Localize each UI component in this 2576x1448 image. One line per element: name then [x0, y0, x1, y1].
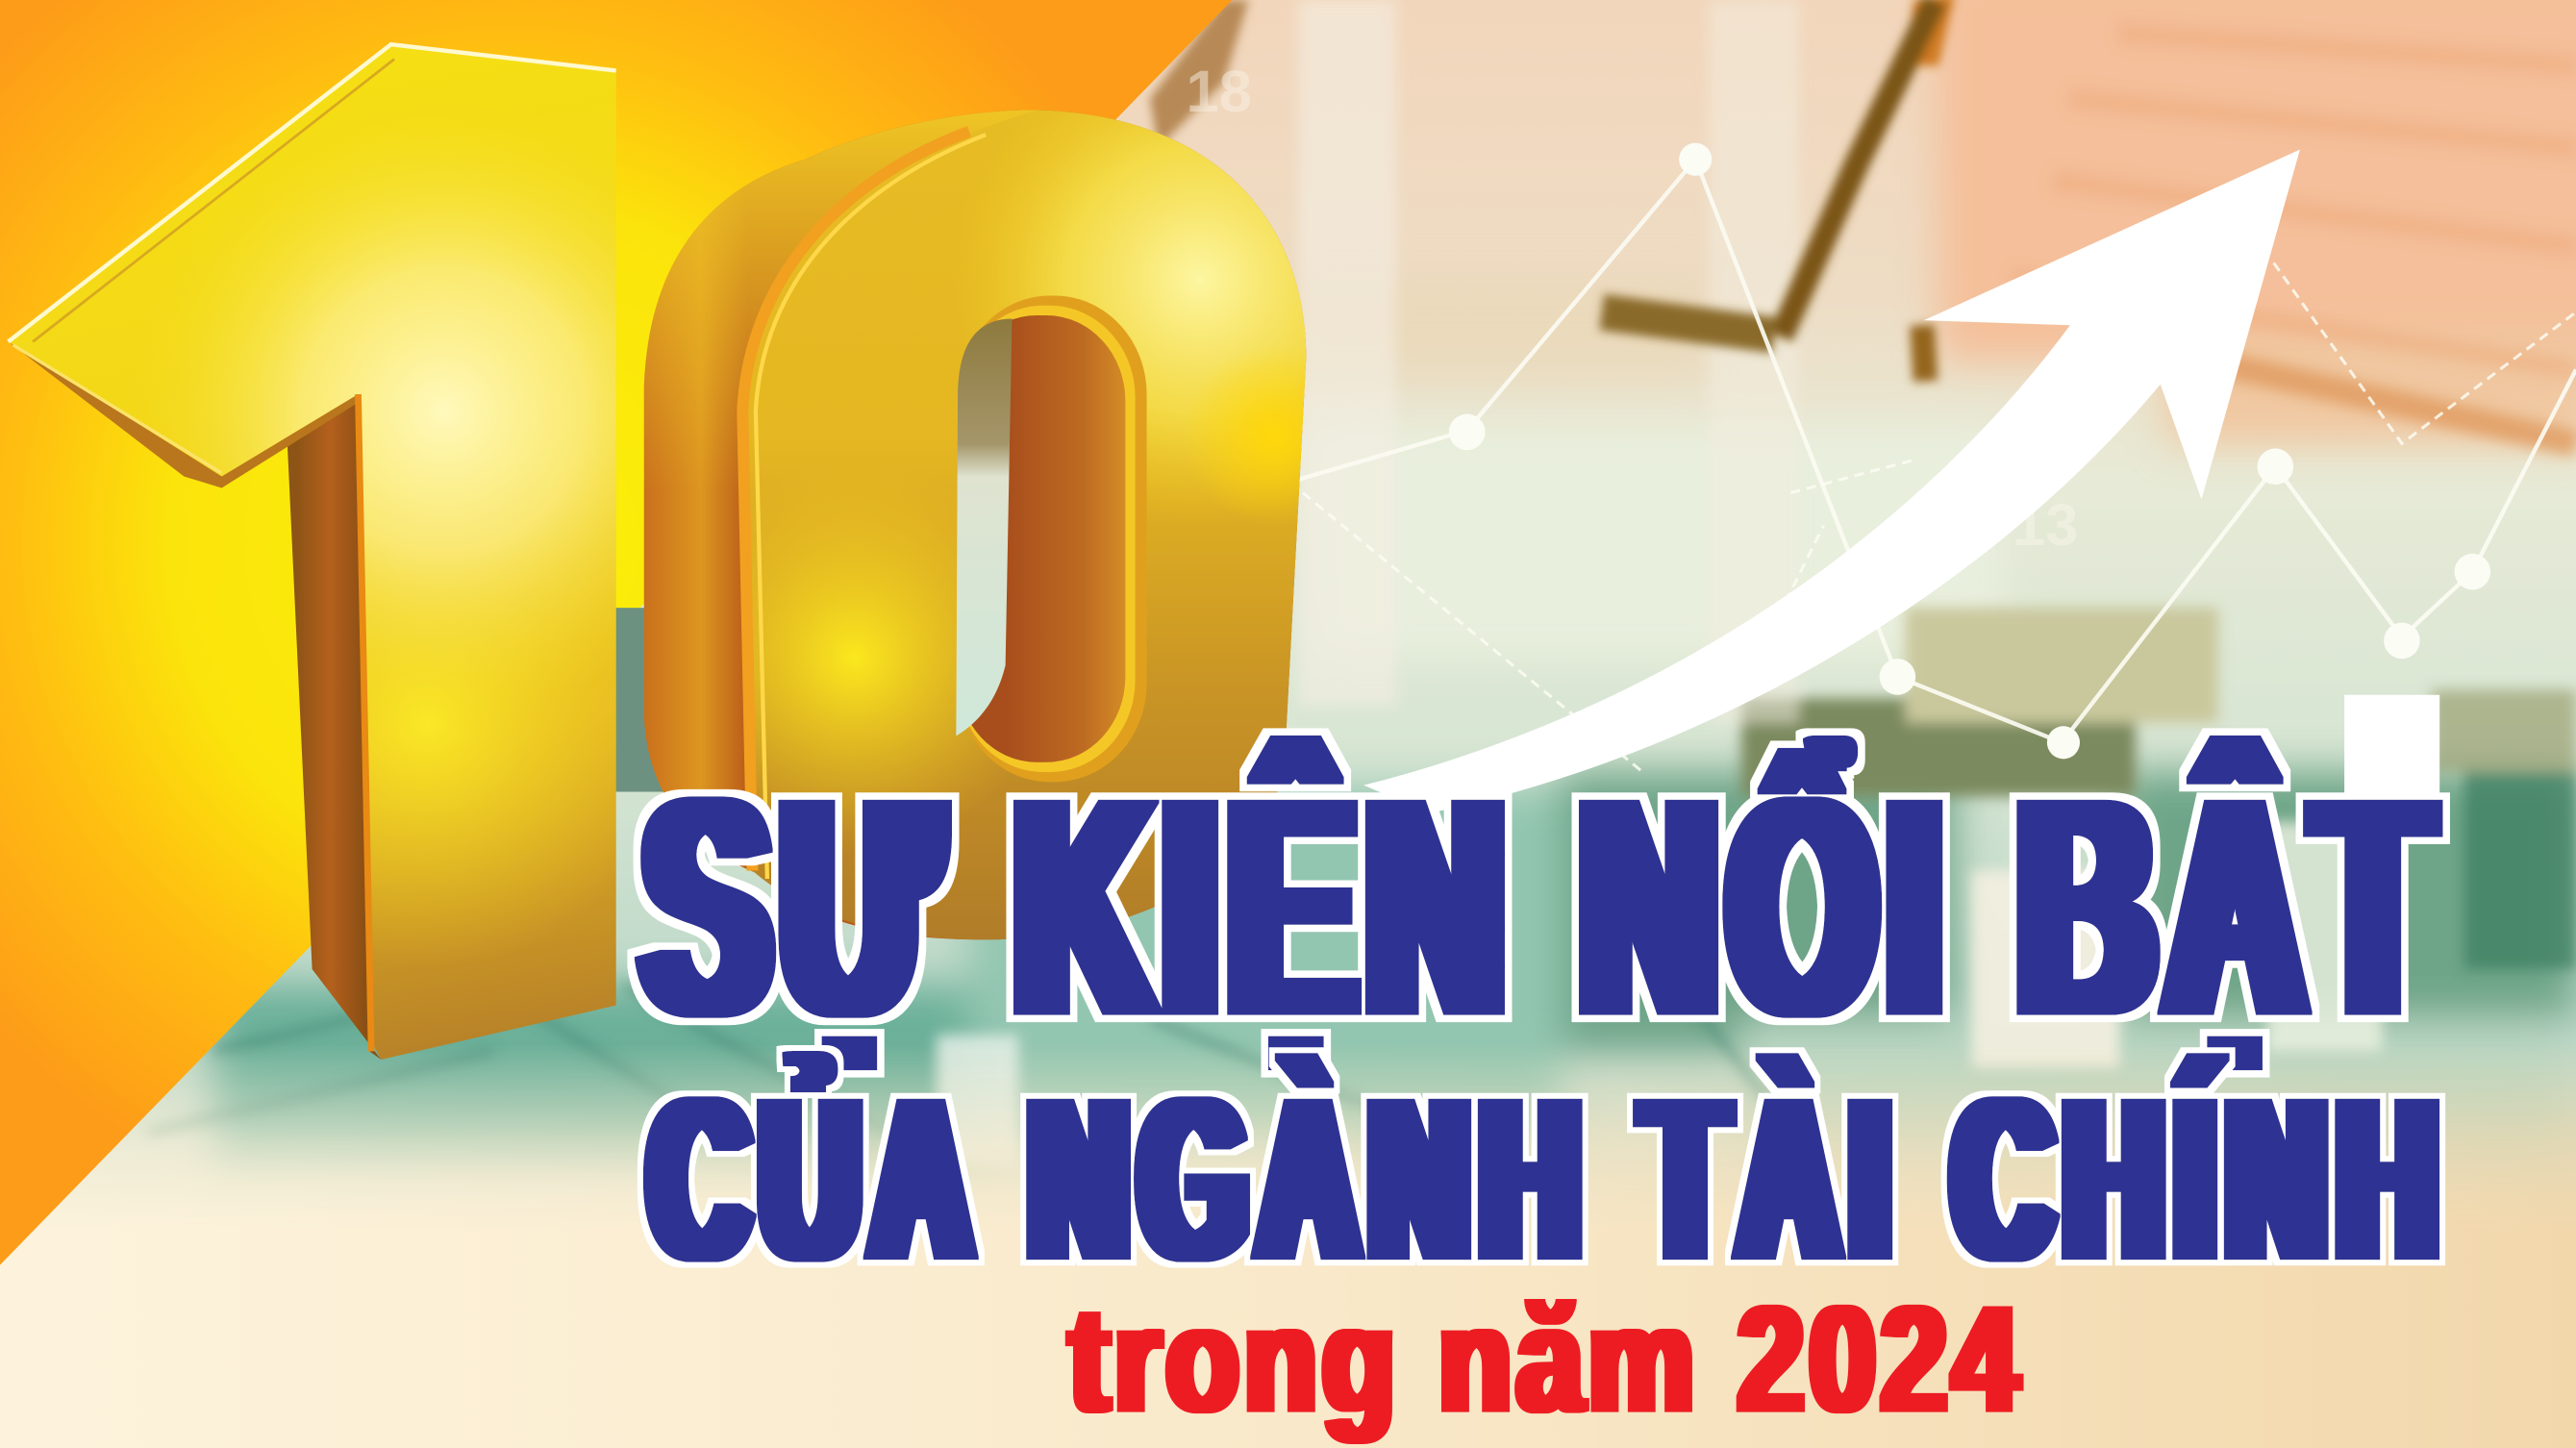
panel: blurred financial photo background: 13 [2013, 492, 2078, 559]
title: line one: SỰ KIỆN NỔI BẬT [644, 734, 2443, 1080]
texture behind the numerals [614, 608, 663, 792]
chart: white line graph with nodes [1298, 143, 2576, 772]
icon: golden digit one [9, 44, 616, 1060]
subtitle: trong năm 2024: trong năm 2024 [1069, 1274, 2024, 1443]
panel: orange diagonal field [0, 0, 1232, 1265]
icon: golden digit zero [644, 110, 1306, 939]
panel: blurred financial photo background: 18 [1187, 59, 1252, 125]
panel: cream lower fade [0, 1052, 2576, 1448]
arrow: rising white trend arrow [1363, 149, 2300, 813]
chart: white bar at right [2344, 695, 2439, 810]
title: line two: CỦA NGÀNH TÀI CHÍNH [651, 1052, 2450, 1308]
